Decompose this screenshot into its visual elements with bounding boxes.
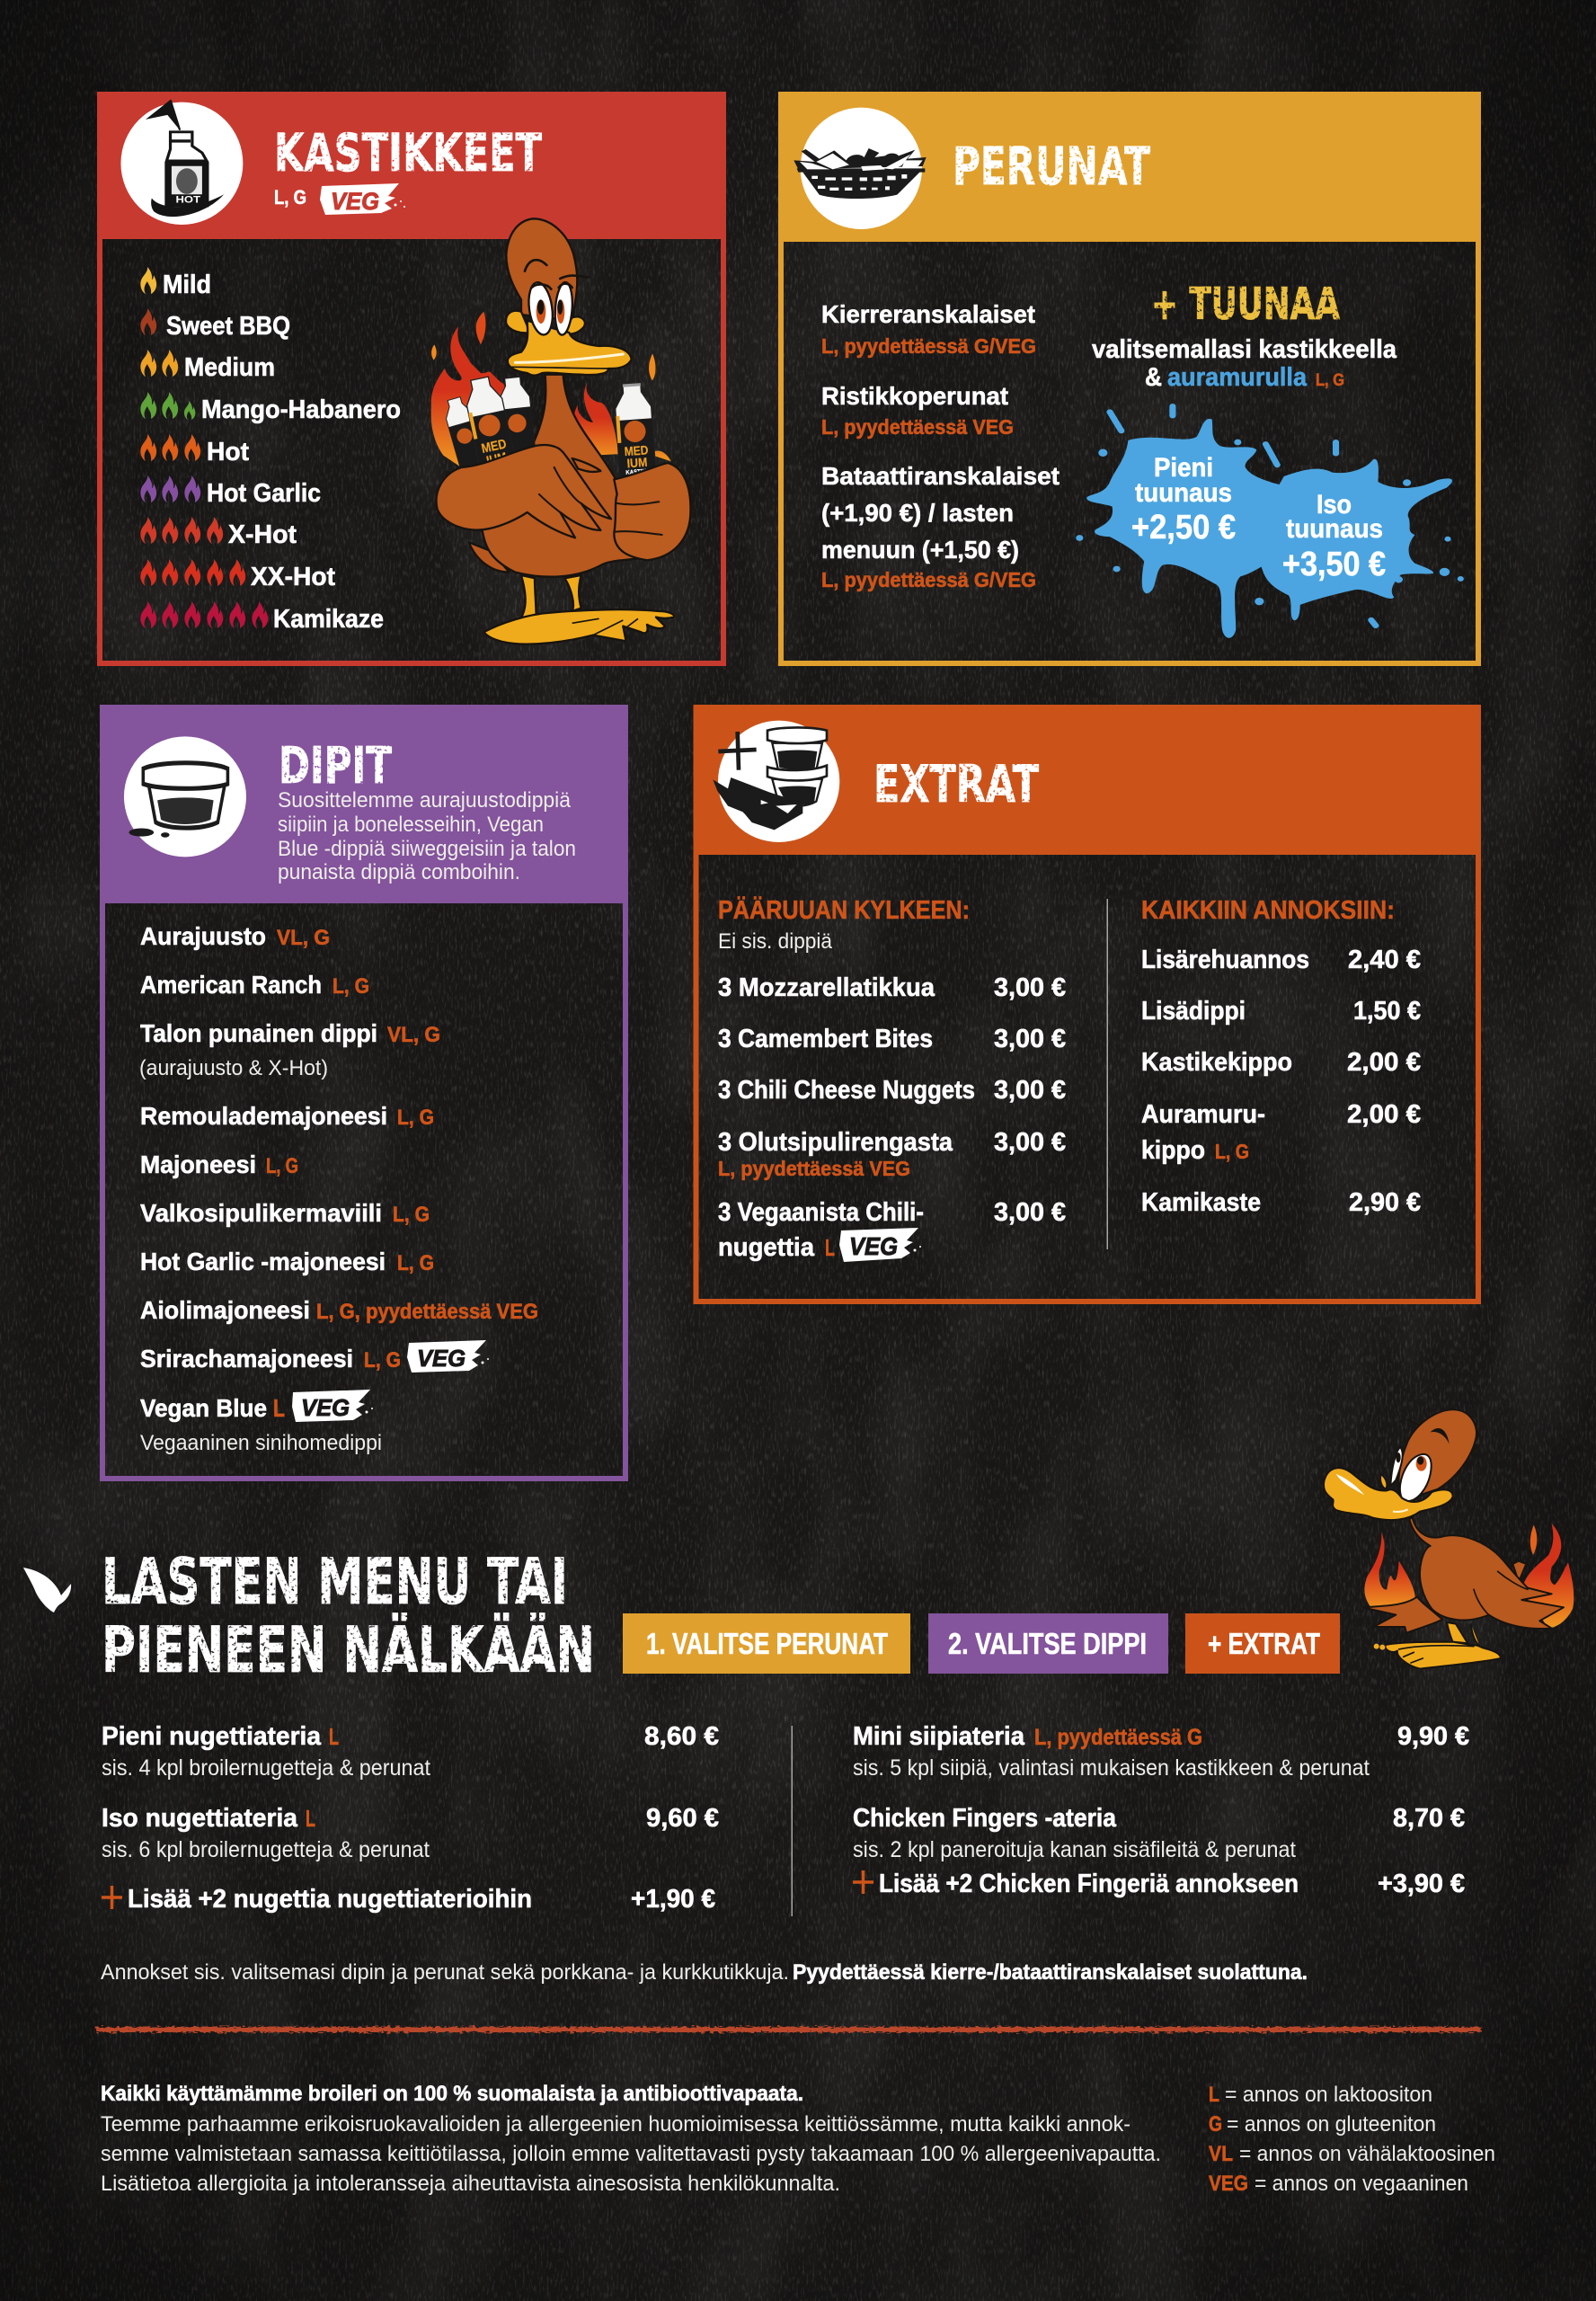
menu column: wings and fingers: +3,90 € [1378,1870,1465,1898]
panel: extrat [694,705,1481,1302]
sauce: hot garlic: Hot Garlic [207,479,321,508]
column: paaruuan kylkeen: nugettia [718,1233,815,1262]
sauce: hot: Hot [207,438,249,466]
dip list [139,922,538,1455]
dip list: Vegan Blue [140,1394,267,1422]
menu column: wings and fingers: Chicken Fingers -ateria [853,1804,1117,1833]
splat: small tuning price: +2,50 € [1131,509,1236,546]
menu column: wings and fingers [853,1722,1469,1898]
title: perunat: PERUNAT [953,136,1150,197]
sauce: sweet bbq: Sweet BBQ [166,312,290,341]
column: paaruuan kylkeen: 3 Olutsipulirengasta [718,1128,953,1157]
illustration: duck with sauce bottles: IUM [626,455,648,470]
section: lasten menu [23,1545,1469,1985]
note: portions include: Annokset sis. valitsemasi dipin ja perunat sekä porkkana- ja kurkkutikkuja. [101,1960,789,1985]
dipit description: siipiin ja bonelesseihin, Vegan [278,813,544,837]
title: dipit: DIPIT [279,737,392,795]
dip list: VL, G [277,926,330,950]
veg badge: vegan blue [292,1390,373,1422]
step: extrat [1185,1613,1340,1674]
sauce: mild [140,267,211,299]
column: paaruuan kylkeen: PÄÄRUUAN KYLKEEN: [718,895,970,925]
veg badge: sriracha: VEG [417,1345,466,1372]
header band [694,705,1481,855]
fries list [821,300,1060,591]
column: paaruuan kylkeen: 3,00 € [994,1198,1066,1227]
panel: dipit [100,705,628,1479]
fries list: (+1,90 €) / lasten [821,499,1014,527]
dip list: L, G [364,1348,401,1373]
legend: allergen codes: = annos on gluteeniton [1227,2112,1436,2137]
column: paaruuan kylkeen: 3 Mozzarellatikkua [718,973,935,1002]
note: portions include [101,1960,1308,1985]
header band [778,92,1481,242]
column: kaikkiin annoksiin: KAIKKIIN ANNOKSIIN: [1141,896,1395,925]
sauce: mild: Mild [163,271,211,299]
illustration: duck with sauce bottles: IUM [485,450,509,469]
sauce: hot [140,434,249,466]
header band [100,705,628,903]
sauce: hot garlic [140,475,321,508]
column: kaikkiin annoksiin: Kamikaste [1141,1188,1261,1217]
dip list: (aurajuusto & X-Hot) [139,1056,328,1080]
dip list: L [273,1394,285,1422]
icon: hot sauce bottle: HOT [176,195,200,205]
dip list: Valkosipulikermaviili [140,1199,382,1227]
step: valitse dippi [928,1613,1168,1674]
dip list: L, G [393,1203,430,1227]
step: valitse dippi: 2. VALITSE DIPPI [948,1627,1147,1660]
menu column: wings and fingers: Lisää +2 Chicken Fingeriä annokseen [879,1870,1299,1898]
heading: lasten menu tai pieneen nalkaan: LASTEN MENU TAI [102,1545,568,1619]
sauce: xx-hot: XX-Hot [251,563,335,591]
column: paaruuan kylkeen: L, pyydettäessä VEG [718,1157,910,1180]
column: paaruuan kylkeen: 3,00 € [994,1076,1066,1105]
panel frame [100,94,723,663]
menu column: nuggets: Iso nugettiateria [102,1804,298,1833]
column: kaikkiin annoksiin: Lisädippi [1141,997,1246,1026]
column: paaruuan kylkeen: 3 Chili Cheese Nuggets [718,1076,975,1105]
illustration: duck with sauce bottles [431,218,690,644]
menu column: wings and fingers: sis. 2 kpl paneroituja kanan sisäfileitä & perunat [853,1837,1296,1862]
allergens: L, G [274,186,306,209]
sauce: medium [140,350,275,382]
column: kaikkiin annoksiin: Kastikekippo [1141,1048,1292,1077]
sauce: sweet bbq [140,308,290,341]
column: paaruuan kylkeen: 3 Camembert Bites [718,1025,933,1053]
menu column: nuggets: Pieni nugettiateria [102,1722,322,1751]
panel frame [696,707,1478,1302]
menu column: nuggets: 9,60 € [646,1804,719,1833]
menu column: nuggets: sis. 4 kpl broilernugetteja & perunat [102,1755,430,1781]
menu column: wings and fingers: 9,90 € [1397,1722,1469,1751]
sauce: medium: Medium [184,353,275,382]
icon: extras [713,721,839,842]
heading: lasten menu tai pieneen nalkaan: PIENEEN NÄLKÄÄN [102,1613,595,1687]
splat: large tuning price: Iso [1317,490,1352,520]
dipit description: Suosittelemme aurajuustodippiä [278,788,572,813]
icon: dip cup [124,736,246,857]
fries list: Bataattiranskalaiset [821,462,1060,490]
veg badge: sriracha [407,1340,489,1373]
sauce: x-hot: X-Hot [228,520,297,549]
title: extrat: EXTRAT [873,755,1039,814]
step: valitse perunat [623,1613,910,1674]
veg badge: chili nuggets: VEG [849,1232,898,1260]
icon: hot sauce bottle [120,100,243,225]
menu column: wings and fingers: sis. 5 kpl siipiä, valintasi mukaisen kastikkeen & perunat [853,1755,1370,1781]
legend: allergen codes: = annos on vähälaktoosinen [1239,2142,1495,2166]
panel: perunat [778,92,1481,663]
column: paaruuan kylkeen: Ei sis. dippiä [718,929,833,954]
footer: allergy information: semme valmistetaan samassa keittiötilassa, jolloin emme valitettavasti pysty takaamaan 100 % allergeenivapautta. [101,2142,1161,2166]
splat: small tuning price [1131,453,1236,546]
dip list: American Ranch [140,971,322,999]
sauce: mango-habanero: Mango-Habanero [201,395,401,424]
dip list: L, G [332,974,369,999]
dip list: L, G [397,1106,434,1130]
menu column: nuggets [102,1722,719,1914]
menu column: nuggets: 8,60 € [644,1722,719,1751]
column: kaikkiin annoksiin [1141,896,1421,1217]
sauce: x-hot [140,517,297,549]
dip list: VL, G [387,1023,440,1047]
tuunaa subtitle: L, G [1316,371,1344,390]
illustration: duck with sauce bottles: MED [624,442,649,458]
tuunaa subtitle: auramurulla [1167,363,1308,392]
icon: wing mark [23,1568,71,1612]
column: kaikkiin annoksiin: Auramuru- [1141,1100,1265,1129]
menu column: wings and fingers: 8,70 € [1393,1804,1465,1833]
step: valitse perunat: 1. VALITSE PERUNAT [646,1627,888,1660]
dipit description: punaista dippiä comboihin. [278,860,520,884]
dip list: L, G [397,1251,434,1275]
legend: allergen codes: VEG [1209,2172,1248,2196]
panel: kastikkeet [97,92,726,663]
legend: allergen codes: = annos on vegaaninen [1255,2172,1468,2196]
menu column: nuggets: Lisää +2 nugettia nugettiaterioihin [128,1885,532,1914]
column: paaruuan kylkeen: 3,00 € [994,1128,1066,1157]
illustration: duck with sauce bottles: MED [480,437,508,457]
sauce: kamikaze [140,601,384,634]
splat: large tuning price [1282,490,1386,583]
sauce list [140,267,401,634]
tuunaa subtitle [1092,335,1397,392]
menu column: nuggets: L [306,1805,315,1832]
menu column: nuggets: sis. 6 kpl broilernugetteja & perunat [102,1837,430,1862]
note: portions include: Pyydettäessä kierre-/bataattiranskalaiset suolattuna. [793,1960,1308,1985]
sauce: xx-hot [140,559,335,591]
icon: blue splats [1076,406,1464,638]
veg badge: vegan blue: VEG [301,1394,350,1421]
icon: fries basket [794,108,927,229]
column: kaikkiin annoksiin: 2,40 € [1348,946,1421,974]
illustration: small duck with flames [1324,1409,1574,1669]
panel frame [102,707,625,1479]
column: paaruuan kylkeen: 3,00 € [994,973,1066,1002]
menu column: nuggets: +1,90 € [631,1885,715,1914]
legend: allergen codes: VL [1209,2142,1233,2166]
fries list: Kierreranskalaiset [821,300,1035,328]
footer: allergy information: Kaikki käyttämämme broileri on 100 % suomalaista ja antibioottivapaata. [101,2082,803,2106]
column: kaikkiin annoksiin: 2,90 € [1349,1188,1421,1217]
veg badge [320,183,405,215]
tuunaa subtitle: valitsemallasi kastikkeella [1092,335,1397,364]
column: kaikkiin annoksiin: kippo [1141,1136,1205,1165]
splat: small tuning price: tuunaus [1135,478,1232,508]
header band [97,92,726,239]
splat: small tuning price: Pieni [1154,453,1213,483]
menu column: nuggets: L [329,1723,339,1750]
fries list: L, pyydettäessä G/VEG [821,334,1036,358]
dipit description: Blue -dippiä siiweggeisiin ja talon [278,837,576,861]
column: paaruuan kylkeen [718,895,1066,1262]
dip list: Hot Garlic -majoneesi [140,1248,386,1275]
fries list: L, pyydettäessä G/VEG [821,568,1036,591]
column: paaruuan kylkeen: L [825,1234,835,1261]
footer: allergy information [101,2082,1161,2196]
column: kaikkiin annoksiin: 1,50 € [1353,997,1421,1026]
column: kaikkiin annoksiin: L, G [1215,1140,1249,1163]
dip list: L, G [266,1154,298,1178]
legend: allergen codes: = annos on laktoositon [1225,2083,1432,2107]
dipit description [278,788,576,884]
dip list: Remoulademajoneesi [140,1102,387,1130]
column: kaikkiin annoksiin: Lisärehuannos [1141,946,1309,974]
dip list: Aiolimajoneesi [140,1296,310,1324]
veg badge: VEG [331,188,379,215]
dip list: Talon punainen dippi [140,1019,377,1047]
menu column: wings and fingers: Mini siipiateria [853,1722,1025,1751]
column: paaruuan kylkeen: 3,00 € [994,1025,1066,1053]
dip list: Aurajuusto [140,922,266,950]
dip list: Vegaaninen sinihomedippi [140,1431,382,1455]
heading: tuunaa: + TUUNAA [1151,279,1340,330]
veg badge: chili nuggets [839,1228,921,1262]
splat: large tuning price: tuunaus [1286,514,1383,544]
footer: allergy information: Lisätietoa allergioita ja intoleransseja aiheuttavista ainesosista henkilökunnalta. [101,2172,840,2196]
column: paaruuan kylkeen: 3 Vegaanista Chili- [718,1198,924,1227]
title: kastikkeet: KASTIKKEET [274,122,542,183]
dip list: Majoneesi [140,1150,256,1178]
dip list: Srirachamajoneesi [140,1345,353,1373]
illustration: duck with sauce bottles: KASTIKE [625,468,651,476]
footer: allergy information: Teemme parhaamme erikoisruokavalioiden ja allergeenien huomioimisessa keittiössämme, mutta kaikki annok- [101,2112,1130,2137]
sauce: kamikaze: Kamikaze [273,605,384,634]
tuunaa subtitle: & [1145,363,1162,392]
column: kaikkiin annoksiin: 2,00 € [1347,1100,1421,1129]
splat: large tuning price: +3,50 € [1282,546,1386,583]
fries list: L, pyydettäessä VEG [821,415,1014,439]
column: kaikkiin annoksiin: 2,00 € [1347,1048,1421,1077]
legend: allergen codes: L [1209,2083,1219,2107]
menu column: wings and fingers: L, pyydettäessä G [1034,1725,1202,1750]
sauce: mango-habanero [140,392,401,424]
fries list: Ristikkoperunat [821,382,1008,410]
legend: allergen codes: G [1209,2112,1222,2137]
panel frame [781,94,1478,663]
fries list: menuun (+1,50 €) [821,536,1019,564]
heading: lasten menu tai pieneen nalkaan [102,1545,595,1687]
step: extrat: + EXTRAT [1208,1627,1320,1660]
legend: allergen codes [1209,2083,1495,2196]
dip list: L, G, pyydettäessä VEG [316,1300,538,1324]
